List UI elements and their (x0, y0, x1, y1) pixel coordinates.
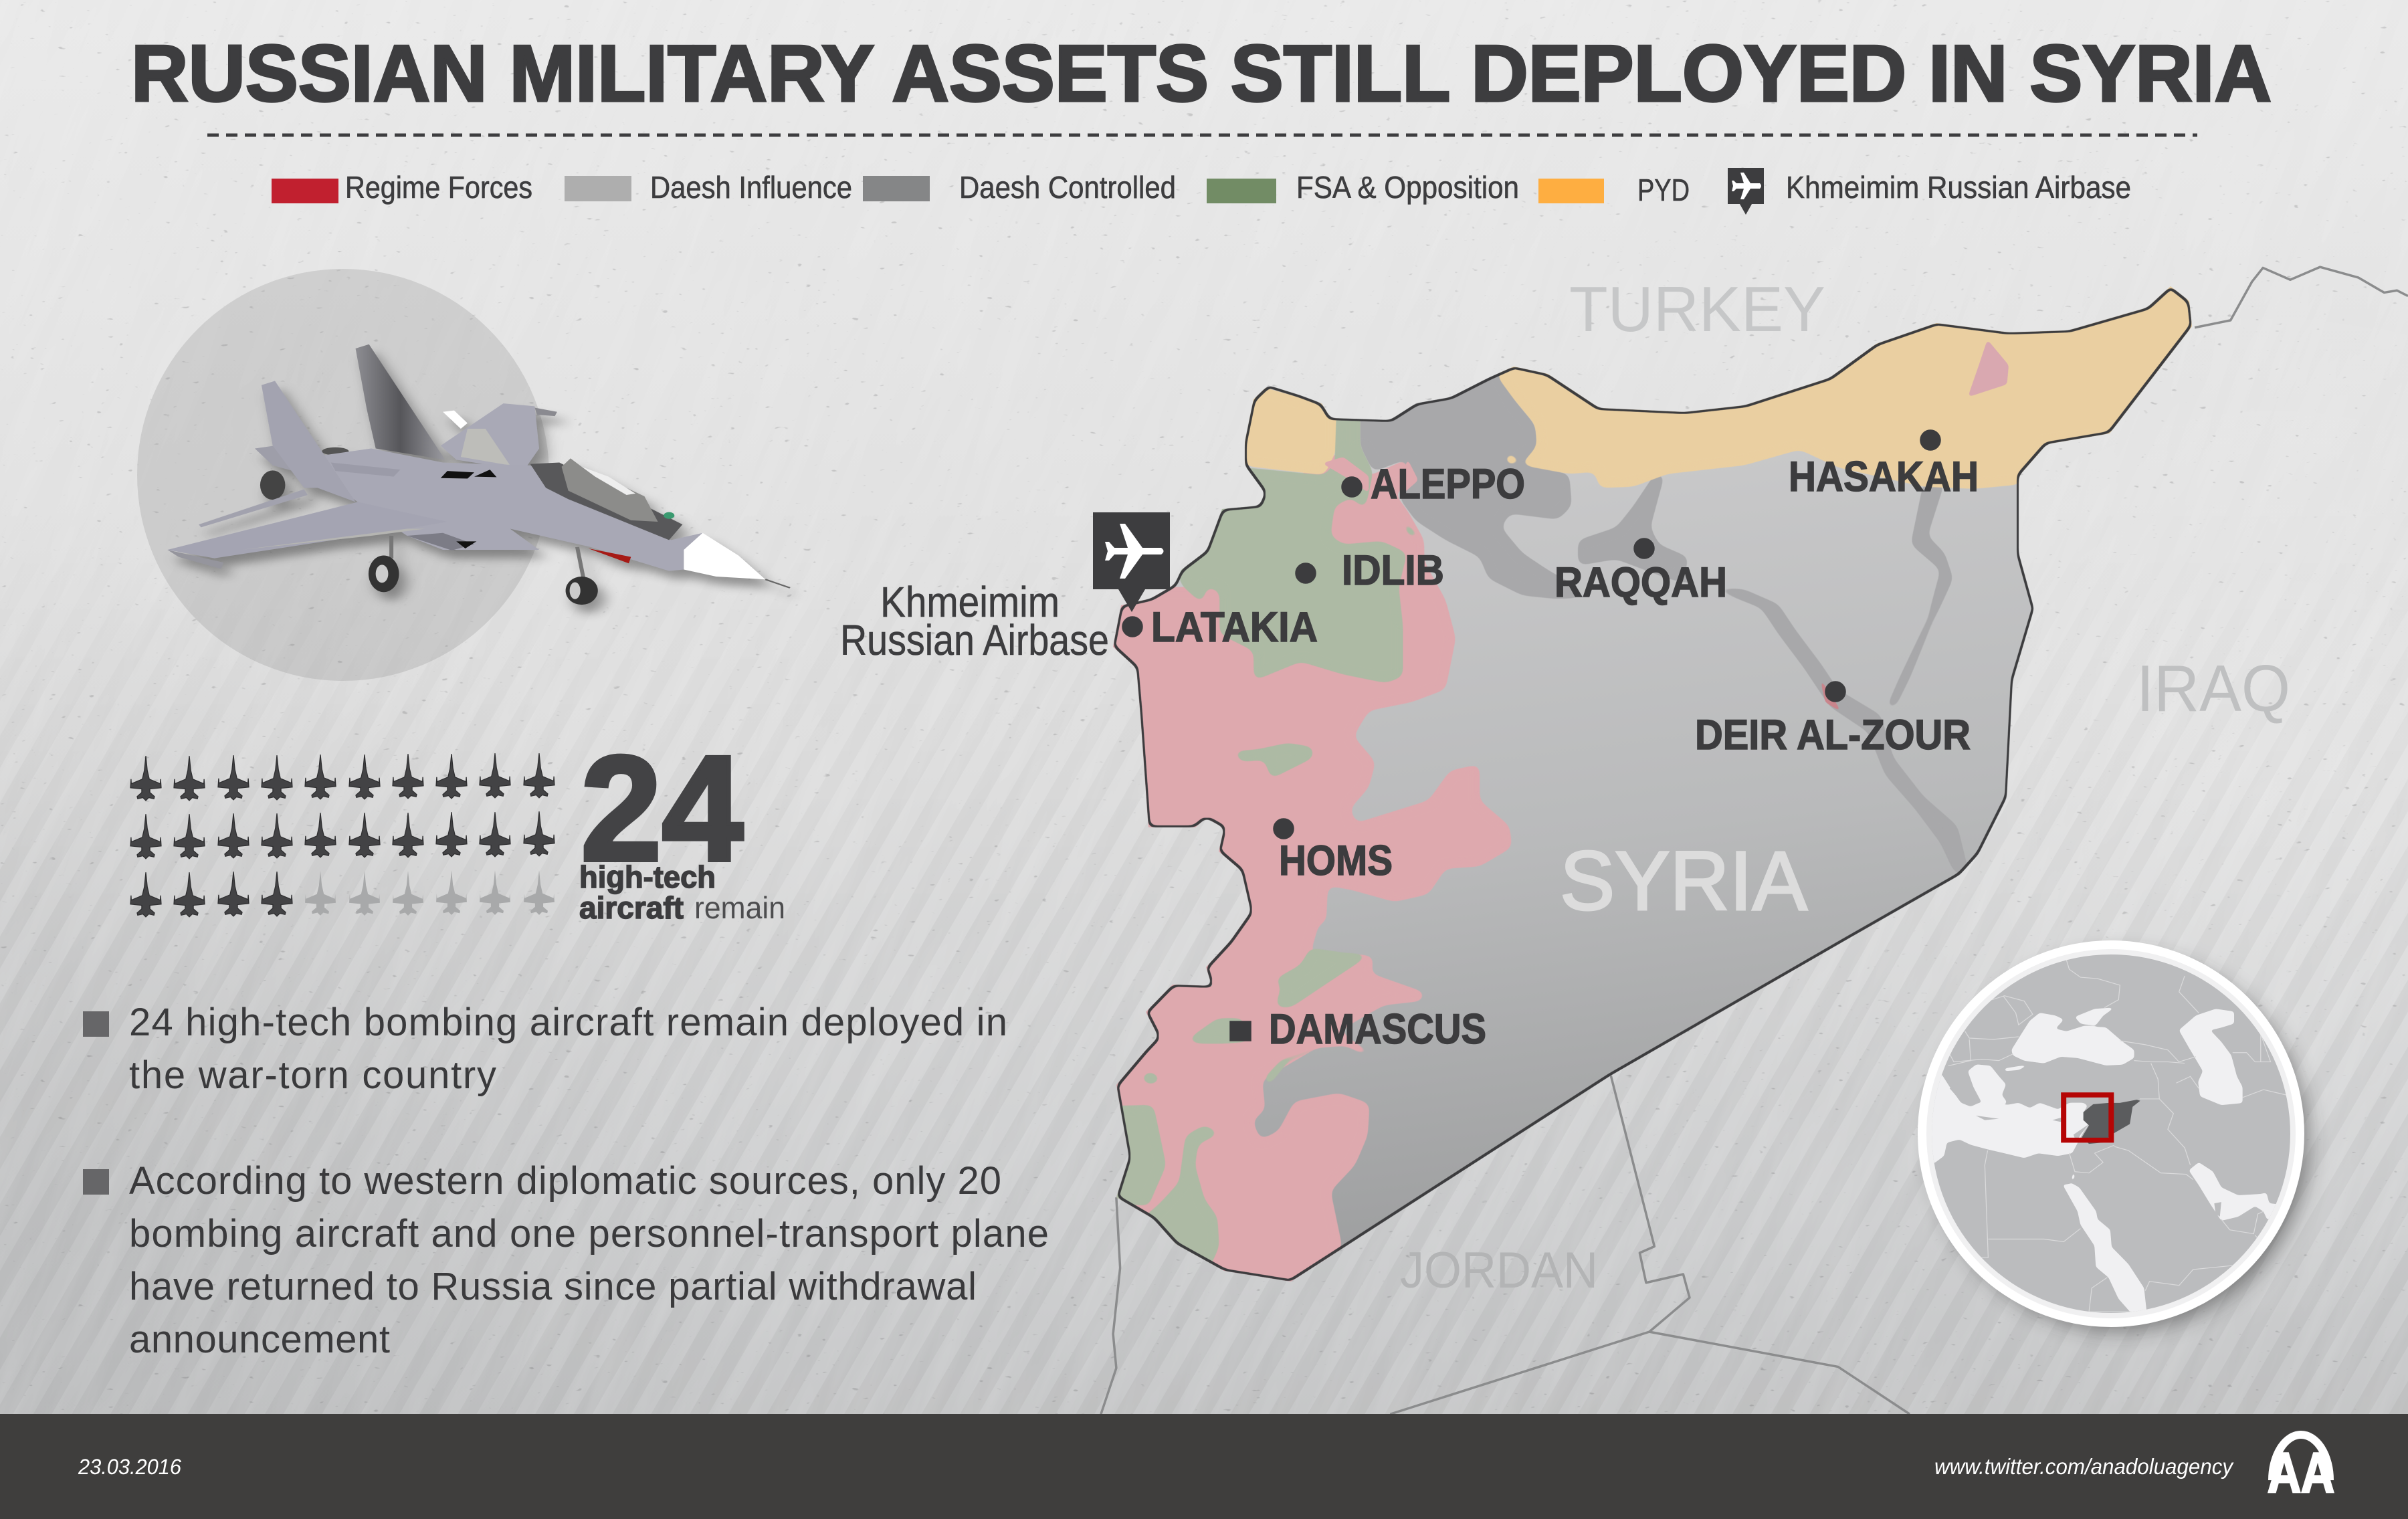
label: Turkey: TURKEY (1569, 274, 1825, 345)
logo: Anadolu Agency: AA (2268, 1441, 2334, 1504)
city: Homs: HOMS (1279, 837, 1393, 884)
aircraft backdrop circle (137, 269, 549, 681)
locator globe (1914, 940, 2308, 1330)
landing gear (391, 536, 584, 581)
city: Idlib: IDLIB (1342, 547, 1444, 594)
rear wheel (260, 470, 285, 500)
legend item: regime forces: Regime Forces (345, 170, 532, 205)
map of Syria (1070, 268, 2241, 1304)
label: Syria: SYRIA (1560, 835, 1808, 928)
city: Hasakah (1789, 430, 1979, 500)
Daesh controlled: Aleppo, Raqqah and rivers (1361, 365, 1971, 882)
FSA: south and Damascus pockets (1096, 948, 1371, 1268)
legend item: daesh controlled (863, 170, 1176, 205)
city: Latakia: LATAKIA (1151, 604, 1318, 651)
title: RUSSIAN MILITARY ASSETS STILL DEPLOYED IN SYRIA (131, 29, 2272, 118)
icon: airbase pin (1093, 512, 1170, 612)
bullet text 2: bombing aircraft and one personnel-transport plane (129, 1212, 1049, 1255)
city: Damascus: DAMASCUS (1269, 1006, 1486, 1053)
aircraft tally icons (130, 753, 555, 917)
legend item: airbase: Khmeimim Russian Airbase (1786, 170, 2131, 205)
city: Homs (1274, 819, 1393, 884)
cockpit (530, 463, 682, 540)
city: Raqqah (1554, 538, 1727, 606)
airbase label (840, 578, 1109, 664)
FSA and opposition areas (1116, 418, 1415, 1263)
regime pockets: Aleppo, Hasakah, Deir al-Zour (1322, 340, 2009, 713)
date: 23.03.2016 (78, 1455, 181, 1479)
bullet text 2: announcement (129, 1318, 390, 1361)
legend item: PYD: PYD (1637, 173, 1690, 207)
bullet text 2: According to western diplomatic sources, only 20 (129, 1159, 1001, 1203)
legend item: FSA and opposition: FSA & Opposition (1296, 170, 1519, 205)
bullet text 1: the war-torn country (129, 1053, 496, 1097)
FSA pocket near Homs (1232, 743, 1314, 779)
big number 24: 24 (581, 725, 743, 892)
deployed aircraft, 24 icons (130, 753, 555, 917)
caption: high-tech aircraft remain (579, 859, 785, 925)
Syria highlighted (2082, 1100, 2140, 1144)
legend item: daesh controlled: Daesh Controlled (959, 170, 1176, 205)
bullet text 2 (83, 1159, 1049, 1361)
country lines (1948, 960, 2286, 1312)
city: Raqqah: RAQQAH (1554, 559, 1727, 606)
seas (1914, 1008, 2280, 1314)
bullet text 2: have returned to Russia since partial withdrawal (129, 1265, 977, 1308)
country labels (1400, 274, 2290, 1299)
city: Deir al-Zour: DEIR AL-ZOUR (1695, 712, 1971, 758)
Syria border (1113, 286, 2192, 1282)
footer bar (0, 1414, 2408, 1519)
legend (272, 168, 2131, 215)
illustration: fighter jet (167, 344, 790, 605)
locator box (2064, 1095, 2111, 1140)
bullet text 1: 24 high-tech bombing aircraft remain deployed in (129, 1001, 1007, 1044)
legend item: daesh influence: Daesh Influence (650, 170, 852, 205)
city: Aleppo: ALEPPO (1371, 461, 1525, 508)
airbase label: Khmeimim (880, 578, 1060, 626)
FSA: north-west (1173, 412, 1407, 683)
legend item: PYD (1538, 173, 1690, 207)
near wing (167, 502, 447, 559)
bullet text 1 (83, 1001, 1007, 1097)
city labels and markers (1122, 430, 1979, 1053)
caption: high-tech aircraft remain: aircraft (579, 890, 684, 925)
FSA: Aleppo sliver (1406, 526, 1415, 535)
PYD: Afrin and northern strip (1245, 286, 2192, 489)
legend item: FSA and opposition (1207, 170, 1519, 205)
red stripe (589, 548, 631, 563)
caption: high-tech aircraft remain: high-tech (579, 859, 716, 894)
legend item: regime forces (272, 170, 532, 205)
twitter address: www.twitter.com/anadoluagency (1934, 1454, 2234, 1479)
city: Deir al-Zour (1695, 682, 1971, 758)
caption: high-tech aircraft remain: remain (694, 890, 785, 925)
neighbouring country borders (1101, 267, 2408, 1414)
airbase label: Russian Airbase (840, 616, 1109, 664)
regime forces: western belt (1113, 455, 1512, 1282)
rear stabilisers (255, 445, 293, 471)
withdrawn aircraft, faded icons (305, 870, 555, 916)
legend item: daesh influence (565, 170, 852, 205)
label: Jordan: JORDAN (1400, 1242, 1598, 1299)
label: Iraq: IRAQ (2136, 651, 2290, 725)
far tail fin (356, 344, 445, 460)
islands and peninsulas (1950, 1084, 2221, 1217)
fuselage (318, 448, 702, 571)
near tail fin (262, 381, 356, 502)
city: Idlib (1296, 547, 1444, 594)
air intakes (441, 471, 474, 479)
radome (684, 533, 765, 579)
far wing (441, 403, 539, 471)
legend item: airbase (1728, 168, 2131, 215)
city: Hasakah: HASAKAH (1789, 453, 1979, 500)
